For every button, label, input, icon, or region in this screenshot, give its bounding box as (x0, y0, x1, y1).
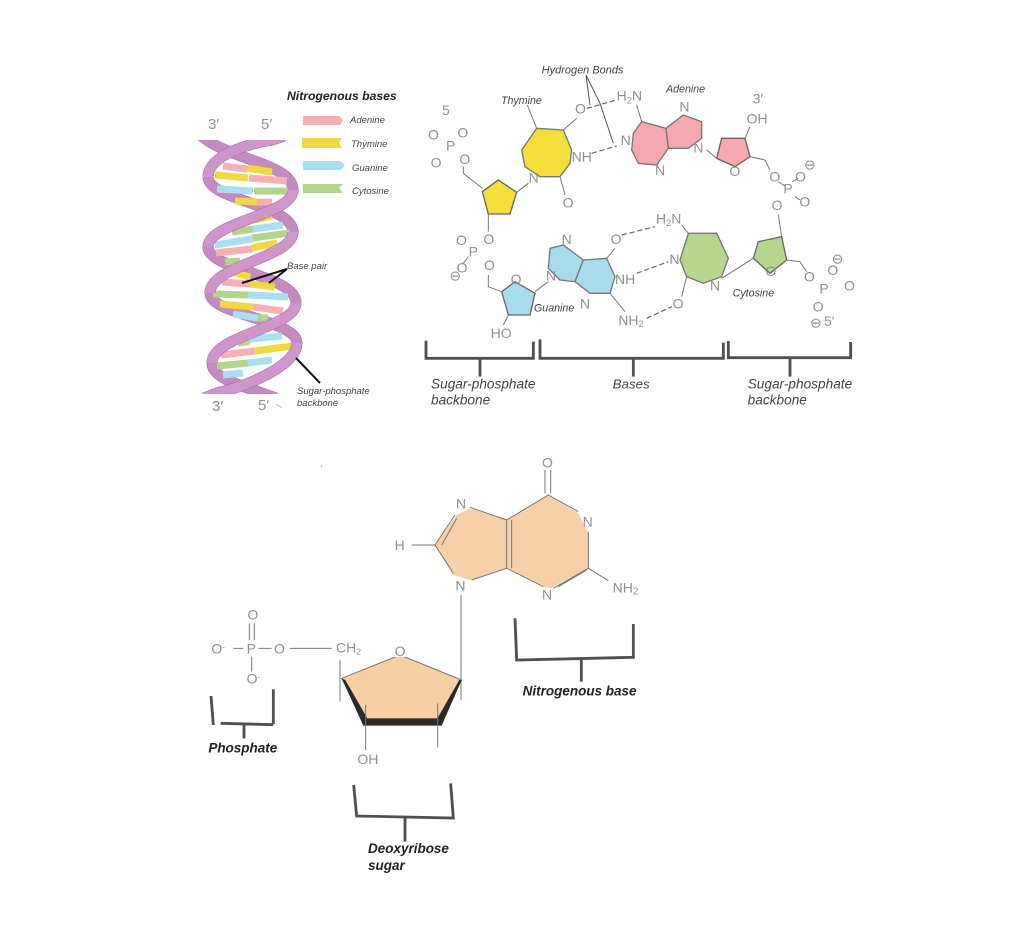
helix front strands (204, 136, 297, 398)
bracket: phosphate: Phosphate (208, 740, 278, 755)
phosphate group: CH (336, 640, 356, 656)
nitrogenous base molecule: N (542, 586, 552, 602)
nitrogenous base molecule: O (542, 454, 553, 470)
cytosine nucleotide: ⊖ (810, 314, 822, 330)
legend: nitrogenous bases (287, 89, 397, 197)
base name labels (501, 83, 774, 315)
thymine nucleotide: O (575, 100, 586, 116)
bracket: sugar-phosphate backbone left (426, 341, 536, 407)
legend item: adenine: Adenine (349, 115, 385, 126)
bracket: deoxyribose sugar: sugar (368, 858, 405, 873)
strand end labels: 5′ (258, 397, 269, 414)
nitrogenous base molecule: H (395, 537, 405, 553)
phosphate group: P (247, 640, 256, 656)
cytosine nucleotide: N (671, 210, 681, 226)
cytosine nucleotide: O (844, 278, 855, 294)
thymine nucleotide: P (446, 138, 455, 154)
adenine nucleotide: N (693, 140, 703, 156)
guanine nucleotide: O (611, 231, 622, 247)
bracket: bases (540, 339, 723, 391)
panel: double helix (196, 116, 370, 415)
nitrogenous base molecule (395, 454, 639, 700)
cytosine nucleotide: N (710, 278, 720, 294)
bracket: sugar-phosphate backbone left: Sugar-phosphate (431, 376, 536, 391)
phosphate group: - (258, 672, 261, 681)
phosphate group: 2 (356, 647, 361, 657)
phosphate group: O (274, 640, 285, 656)
bracket: deoxyribose sugar: Deoxyribose (368, 841, 449, 856)
callout: base pair (242, 261, 328, 283)
guanine nucleotide: O (456, 232, 467, 248)
thymine nucleotide: NH (572, 149, 592, 165)
guanine nucleotide: ⊖ (449, 268, 461, 284)
thymine nucleotide (428, 100, 592, 232)
legend item: cytosine: Cytosine (352, 186, 389, 197)
base name labels: Adenine (665, 83, 705, 95)
guanine nucleotide: NH (615, 271, 635, 287)
bracket: sugar-phosphate backbone right: backbone (748, 392, 807, 407)
nitrogenous base molecule: N (583, 514, 593, 530)
guanine nucleotide: P (469, 244, 478, 260)
base name labels: Guanine (534, 303, 574, 315)
guanine nucleotide: HO (491, 325, 512, 341)
adenine nucleotide: 2 (627, 95, 632, 105)
nitrogenous base molecule: 2 (633, 587, 639, 598)
phosphate group (211, 606, 361, 686)
bracket: nitrogenous base (515, 618, 637, 698)
callout: base pair: Base pair (287, 261, 328, 272)
panel: base pairing chemistry (426, 64, 855, 407)
cytosine nucleotide: O (673, 295, 684, 311)
cytosine nucleotide: N (669, 251, 679, 267)
guanine nucleotide: N (562, 231, 572, 247)
cytosine nucleotide: O (765, 263, 776, 279)
base pair rungs (213, 166, 292, 375)
cytosine nucleotide: O (827, 262, 838, 278)
strand end labels: 3′ (208, 116, 219, 133)
bracket: nitrogenous base: Nitrogenous base (523, 683, 637, 698)
phosphate group: O (211, 640, 222, 656)
guanine nucleotide: O (484, 257, 495, 273)
adenine nucleotide: N (632, 88, 642, 104)
guanine nucleotide: N (580, 295, 590, 311)
phosphate group: O (247, 606, 258, 622)
panel: nucleotide structure (208, 454, 639, 873)
adenine nucleotide: O (769, 169, 780, 185)
cytosine nucleotide: 5′ (824, 313, 835, 329)
adenine nucleotide: 3′ (753, 90, 763, 106)
nitrogenous base molecule: N (455, 578, 465, 594)
base name labels: Thymine (501, 95, 542, 107)
thymine nucleotide: O (459, 151, 470, 167)
legend item: guanine: Guanine (352, 163, 388, 174)
bracket: bases: Bases (613, 376, 650, 391)
nitrogenous base molecule: N (456, 495, 466, 511)
thymine nucleotide: O (457, 124, 468, 140)
bracket: deoxyribose sugar (354, 783, 453, 873)
cytosine nucleotide: O (804, 269, 815, 285)
adenine nucleotide: ⊖ (804, 156, 816, 172)
adenine nucleotide: H (617, 88, 627, 104)
phosphate group: O (247, 670, 258, 686)
guanine nucleotide: O (457, 260, 468, 276)
guanine nucleotide (449, 231, 644, 341)
adenine nucleotide: O (729, 163, 740, 179)
legend heading: Nitrogenous bases (287, 89, 397, 103)
cytosine nucleotide: P (819, 280, 829, 296)
deoxyribose sugar ring: OH (357, 751, 378, 767)
guanine nucleotide: O (483, 231, 494, 247)
guanine nucleotide: O (511, 271, 522, 287)
bracket: sugar-phosphate backbone right (728, 341, 853, 407)
callout: sugar-phosphate backbone (296, 358, 370, 409)
helix back strands (196, 132, 297, 398)
adenine nucleotide: N (655, 162, 665, 178)
thymine nucleotide: O (563, 194, 574, 210)
guanine nucleotide: 2 (639, 319, 644, 329)
callout: sugar-phosphate backbone: backbone (297, 398, 338, 409)
deoxyribose sugar ring: O (395, 643, 406, 659)
strand end labels: 5′ (261, 116, 272, 133)
thymine nucleotide: O (431, 154, 442, 170)
legend item: thymine: Thymine (351, 139, 387, 150)
bracket: phosphate (208, 689, 278, 755)
thymine nucleotide: O (428, 126, 439, 142)
cytosine nucleotide: O (813, 299, 824, 315)
phosphate group: - (222, 642, 225, 651)
base name labels: Cytosine (733, 288, 774, 300)
cytosine nucleotide: 2 (666, 218, 671, 228)
cytosine nucleotide (656, 210, 855, 330)
cytosine nucleotide: H (656, 210, 666, 226)
adenine nucleotide: P (783, 180, 793, 196)
nitrogenous base molecule: NH (613, 580, 633, 596)
adenine nucleotide: OH (747, 110, 768, 126)
thymine nucleotide: N (529, 170, 539, 186)
hydrogen bonds: Hydrogen Bonds (542, 64, 624, 76)
hydrogen bonds (542, 64, 672, 318)
callout: sugar-phosphate backbone: Sugar-phosphate (297, 386, 370, 397)
adenine nucleotide: O (799, 194, 810, 210)
thymine nucleotide: 5 (442, 102, 450, 118)
cytosine nucleotide: ⊖ (832, 250, 843, 266)
adenine nucleotide: N (621, 132, 631, 148)
adenine nucleotide (617, 88, 816, 213)
guanine nucleotide: N (546, 268, 556, 284)
adenine nucleotide: N (679, 99, 689, 115)
adenine nucleotide: O (795, 169, 806, 185)
guanine nucleotide: NH (618, 312, 639, 328)
strand end labels (208, 116, 272, 415)
adenine nucleotide: O (772, 197, 783, 213)
bracket: sugar-phosphate backbone left: backbone (431, 392, 491, 407)
deoxyribose sugar ring (340, 643, 462, 767)
strand end labels: 3′ (212, 398, 223, 415)
bracket: sugar-phosphate backbone right: Sugar-phosphate (748, 376, 853, 391)
